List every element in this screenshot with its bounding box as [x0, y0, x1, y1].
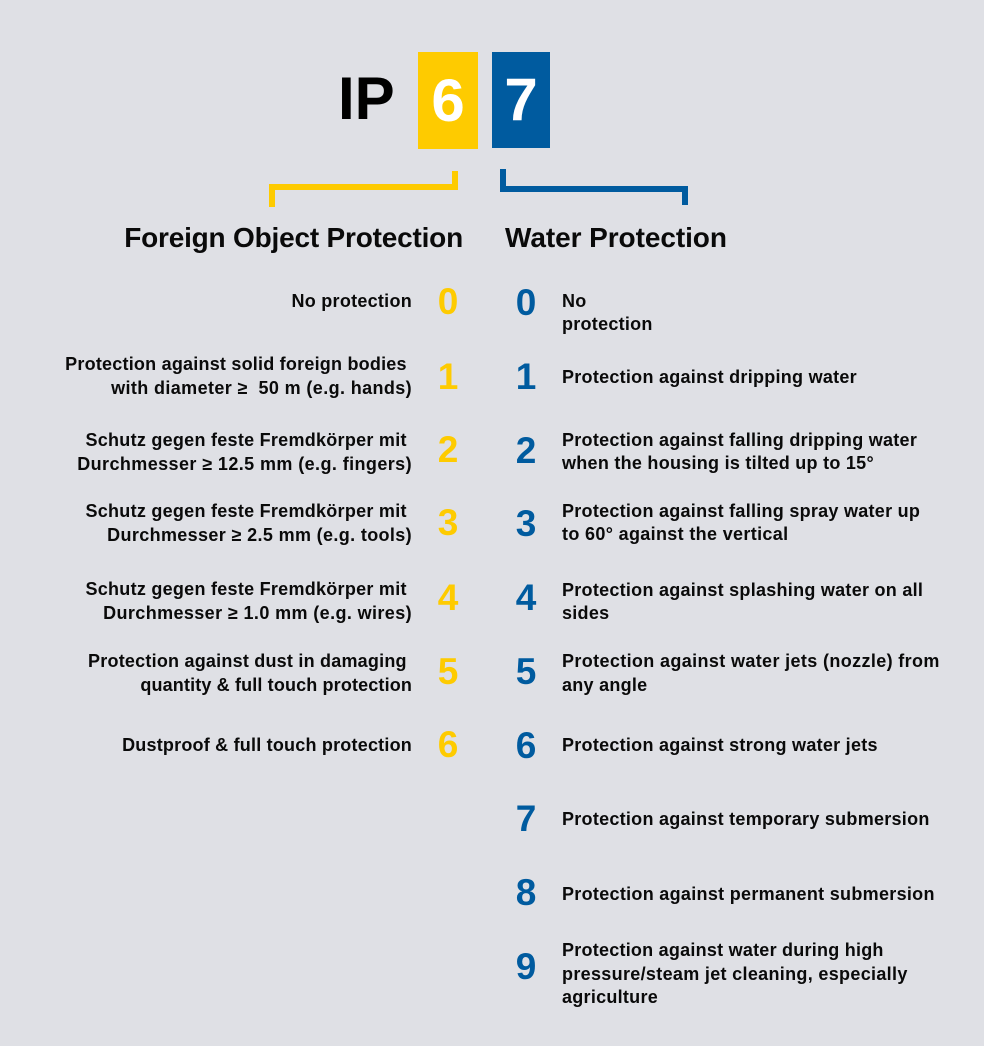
panel: water levels — [516, 282, 940, 1007]
level 7 number: 7 — [516, 798, 536, 839]
level 5 text: Protection against water jets (nozzle) from — [562, 651, 940, 671]
level 1 number: 1 — [438, 356, 458, 397]
level 0 text: No — [562, 290, 587, 310]
level 1 number: 1 — [516, 356, 536, 397]
title: IP label: IP — [338, 65, 395, 132]
level 6 text: Protection against strong water jets — [562, 735, 878, 755]
level 6 text: Dustproof & full touch protection — [122, 735, 412, 755]
level 6 number: 6 — [516, 725, 536, 766]
level 0 text: protection — [562, 314, 653, 334]
level 5 text: any angle — [562, 674, 647, 694]
level 3 text — [85, 501, 412, 545]
level 9 text — [562, 940, 908, 1007]
level 4 text — [562, 580, 923, 623]
level 1 text: Protection against solid foreign bodies — [65, 354, 407, 374]
level 1 text: Protection against dripping water — [562, 367, 857, 387]
level 0 text — [562, 290, 653, 334]
level 2 number: 2 — [438, 429, 458, 470]
level 2 text — [562, 430, 917, 473]
level 5 number: 5 — [516, 651, 536, 692]
level 9 text: pressure/steam jet cleaning, especially — [562, 964, 908, 984]
level 0 number: 0 — [516, 282, 536, 323]
level 2 text: Protection against falling dripping water — [562, 430, 917, 450]
level 7 text: Protection against temporary submersion — [562, 809, 930, 829]
level 1 text — [65, 354, 412, 398]
level 4 text — [85, 579, 412, 623]
blue bracket — [500, 169, 688, 205]
level 5 number: 5 — [438, 651, 458, 692]
level 2 text: Schutz gegen feste Fremdkörper mit — [85, 430, 407, 450]
yellow digit box: 6 — [431, 67, 465, 134]
level 4 text: Protection against splashing water on all — [562, 580, 923, 600]
yellow bracket — [269, 171, 458, 207]
level 3 text: to 60° against the vertical — [562, 524, 788, 544]
level 9 text: Protection against water during high — [562, 940, 884, 960]
level 4 text: Durchmesser ≥ 1.0 mm (e.g. wires) — [103, 602, 412, 622]
level 1 text: with diameter ≥ 50 m (e.g. hands) — [111, 378, 412, 398]
yellow digit box — [418, 52, 478, 149]
level 4 number: 4 — [516, 577, 536, 618]
heading: water protection: Water Protection — [505, 222, 727, 253]
level 3 text — [562, 500, 920, 544]
level 9 number: 9 — [516, 946, 536, 987]
blue digit box: 7 — [504, 66, 538, 133]
panel: foreign object levels — [65, 281, 458, 765]
level 2 number: 2 — [516, 430, 536, 471]
level 2 text — [77, 430, 412, 474]
level 8 text: Protection against permanent submersion — [562, 884, 935, 904]
level 3 text: Protection against falling spray water up — [562, 500, 920, 520]
level 6 number: 6 — [438, 724, 458, 765]
level 9 text: agriculture — [562, 987, 658, 1007]
level 5 text — [88, 651, 412, 695]
level 2 text: Durchmesser ≥ 12.5 mm (e.g. fingers) — [77, 454, 412, 474]
level 2 text: when the housing is tilted up to 15° — [562, 453, 874, 473]
level 5 text: Protection against dust in damaging — [88, 651, 407, 671]
level 5 text — [562, 651, 940, 695]
level 4 text: Schutz gegen feste Fremdkörper mit — [85, 579, 407, 599]
level 4 text: sides — [562, 603, 609, 623]
level 3 text: Schutz gegen feste Fremdkörper mit — [85, 501, 407, 521]
level 4 number: 4 — [438, 577, 458, 618]
heading: foreign object protection: Foreign Object Protection — [124, 222, 463, 253]
level 0 text: No protection — [291, 290, 412, 310]
level 5 text: quantity & full touch protection — [140, 674, 412, 694]
level 8 number: 8 — [516, 872, 536, 913]
level 3 text: Durchmesser ≥ 2.5 mm (e.g. tools) — [107, 524, 412, 544]
blue digit box — [492, 52, 550, 148]
level 3 number: 3 — [438, 502, 458, 543]
level 0 number: 0 — [438, 281, 458, 322]
level 3 number: 3 — [516, 503, 536, 544]
